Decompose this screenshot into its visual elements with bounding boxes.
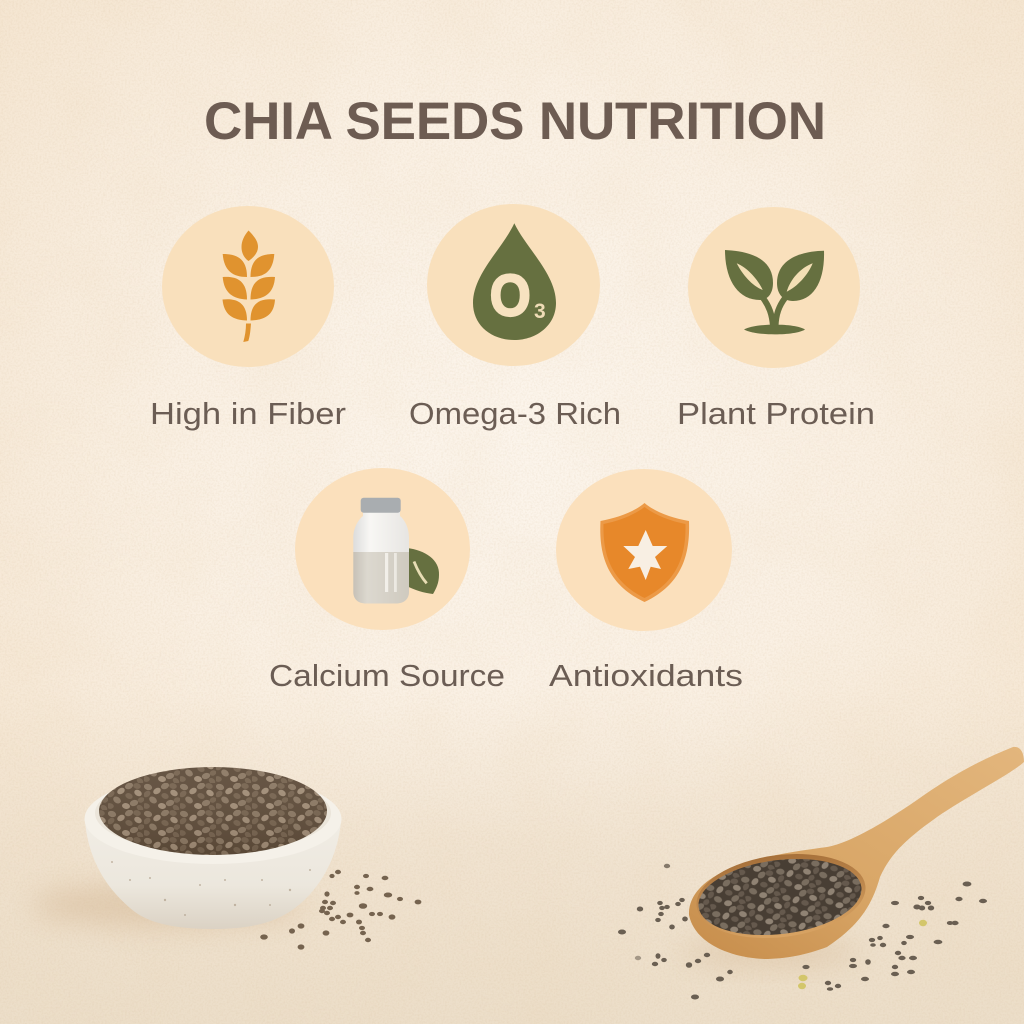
icon: oil drop: O — [490, 264, 531, 328]
icon: oil drop — [473, 223, 556, 340]
label: calcium source: Calcium Source — [269, 658, 505, 693]
label: antioxidants: Antioxidants — [549, 658, 743, 693]
label: omega-3 rich: Omega-3 Rich — [409, 396, 621, 431]
panel: plant protein — [677, 207, 875, 431]
yellow seeds near spoon — [798, 920, 927, 989]
wooden spoon with seeds — [680, 747, 1024, 964]
icon circle: protein — [688, 207, 860, 368]
icon: shield with star — [600, 503, 689, 602]
icon circle: fiber — [162, 206, 334, 367]
scattered seeds near spoon — [618, 864, 987, 1000]
label: high in fiber: High in Fiber — [150, 396, 346, 431]
icon: sprout — [725, 250, 824, 334]
icon: bottle and leaf — [353, 498, 439, 604]
bowl of chia seeds — [30, 767, 342, 929]
panel: calcium source — [269, 468, 505, 693]
panel: high in fiber — [150, 206, 346, 431]
icon: wheat — [222, 230, 275, 342]
icon circle: antioxidants — [556, 469, 732, 631]
title: CHIA SEEDS NUTRITION — [204, 92, 826, 151]
panel: antioxidants — [549, 469, 743, 693]
panel: omega-3 rich — [409, 204, 621, 431]
icon circle: calcium — [295, 468, 470, 630]
label: plant protein: Plant Protein — [677, 396, 875, 431]
icon circle: omega — [427, 204, 600, 366]
leaf — [407, 548, 439, 594]
scattered seeds near bowl — [260, 870, 421, 950]
icon: oil drop: 3 — [534, 300, 546, 323]
